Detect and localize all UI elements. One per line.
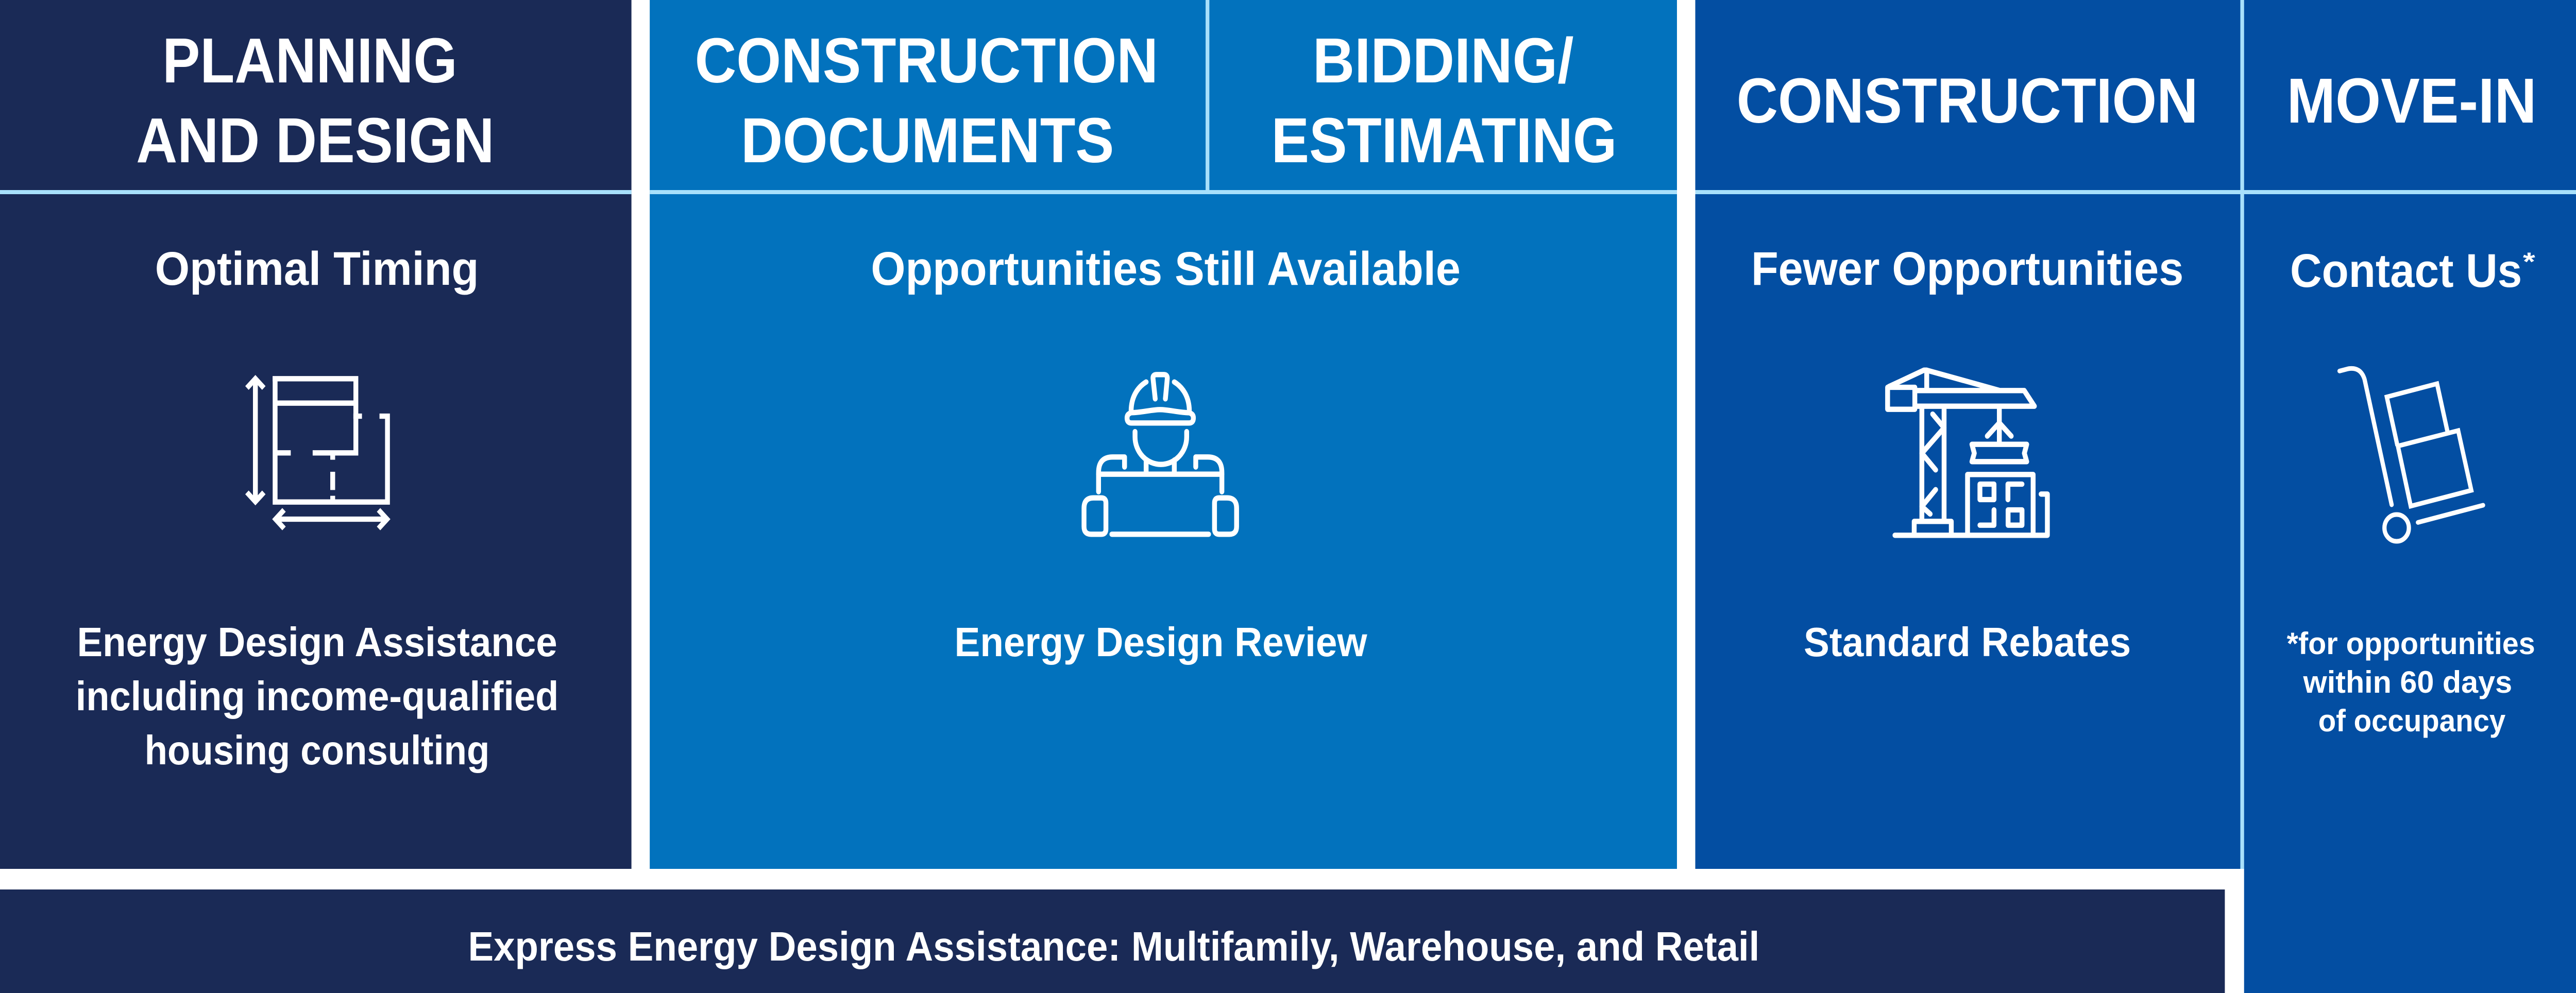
heading: construction: CONSTRUCTION (1737, 65, 2198, 136)
icon: hand truck with boxes (2340, 368, 2483, 541)
panel: construction documents and bidding (650, 0, 1677, 869)
text: standard rebates: Standard Rebates (1804, 620, 2131, 665)
heading: construction documents: CONSTRUCTION (695, 25, 1158, 96)
icon: tower crane and building (1888, 370, 2047, 535)
text: energy design assistance: including income-qualified (76, 674, 558, 720)
subheading: optimal timing: Optimal Timing (155, 242, 479, 295)
heading: bidding estimating: BIDDING/ (1313, 25, 1573, 96)
heading: planning and design: PLANNING (162, 25, 457, 96)
text: energy design assistance: housing consulting (145, 728, 489, 774)
heading: bidding estimating (1272, 25, 1617, 176)
icon: construction worker with plans (1084, 374, 1236, 534)
heading: bidding estimating: ESTIMATING (1272, 105, 1617, 176)
text: energy design assistance: Energy Design Assistance (77, 620, 557, 665)
panel: construction and move-in background (1696, 0, 2576, 993)
text: occupancy footnote (2287, 627, 2535, 739)
panel: planning and design (0, 0, 632, 869)
subheading: fewer opportunities: Fewer Opportunities (1751, 242, 2183, 295)
text: energy design assistance (76, 620, 558, 774)
text: energy design review: Energy Design Review (955, 620, 1367, 665)
heading: move-in: MOVE-IN (2287, 65, 2536, 136)
subheading: contact us: * (2523, 248, 2535, 276)
subheading: contact us: Contact Us (2290, 244, 2522, 297)
icon: floor plan (247, 379, 388, 528)
heading: construction documents: DOCUMENTS (741, 105, 1114, 176)
panel: move-in (2287, 65, 2536, 739)
text: occupancy footnote: of occupancy (2318, 704, 2505, 739)
heading: planning and design (136, 25, 495, 176)
heading: construction documents (695, 25, 1158, 176)
panel: express energy design assistance bar (0, 889, 2225, 993)
text: occupancy footnote: within 60 days (2303, 665, 2512, 700)
heading: planning and design: AND DESIGN (136, 105, 495, 176)
text: occupancy footnote: *for opportunities (2287, 627, 2535, 661)
panel: construction (1737, 65, 2198, 665)
text: express energy design assistance: Express Energy Design Assistance: Multifamily, Warehouse, and Retail (468, 924, 1759, 970)
subheading: opportunities still available: Opportunities Still Available (871, 242, 1461, 295)
